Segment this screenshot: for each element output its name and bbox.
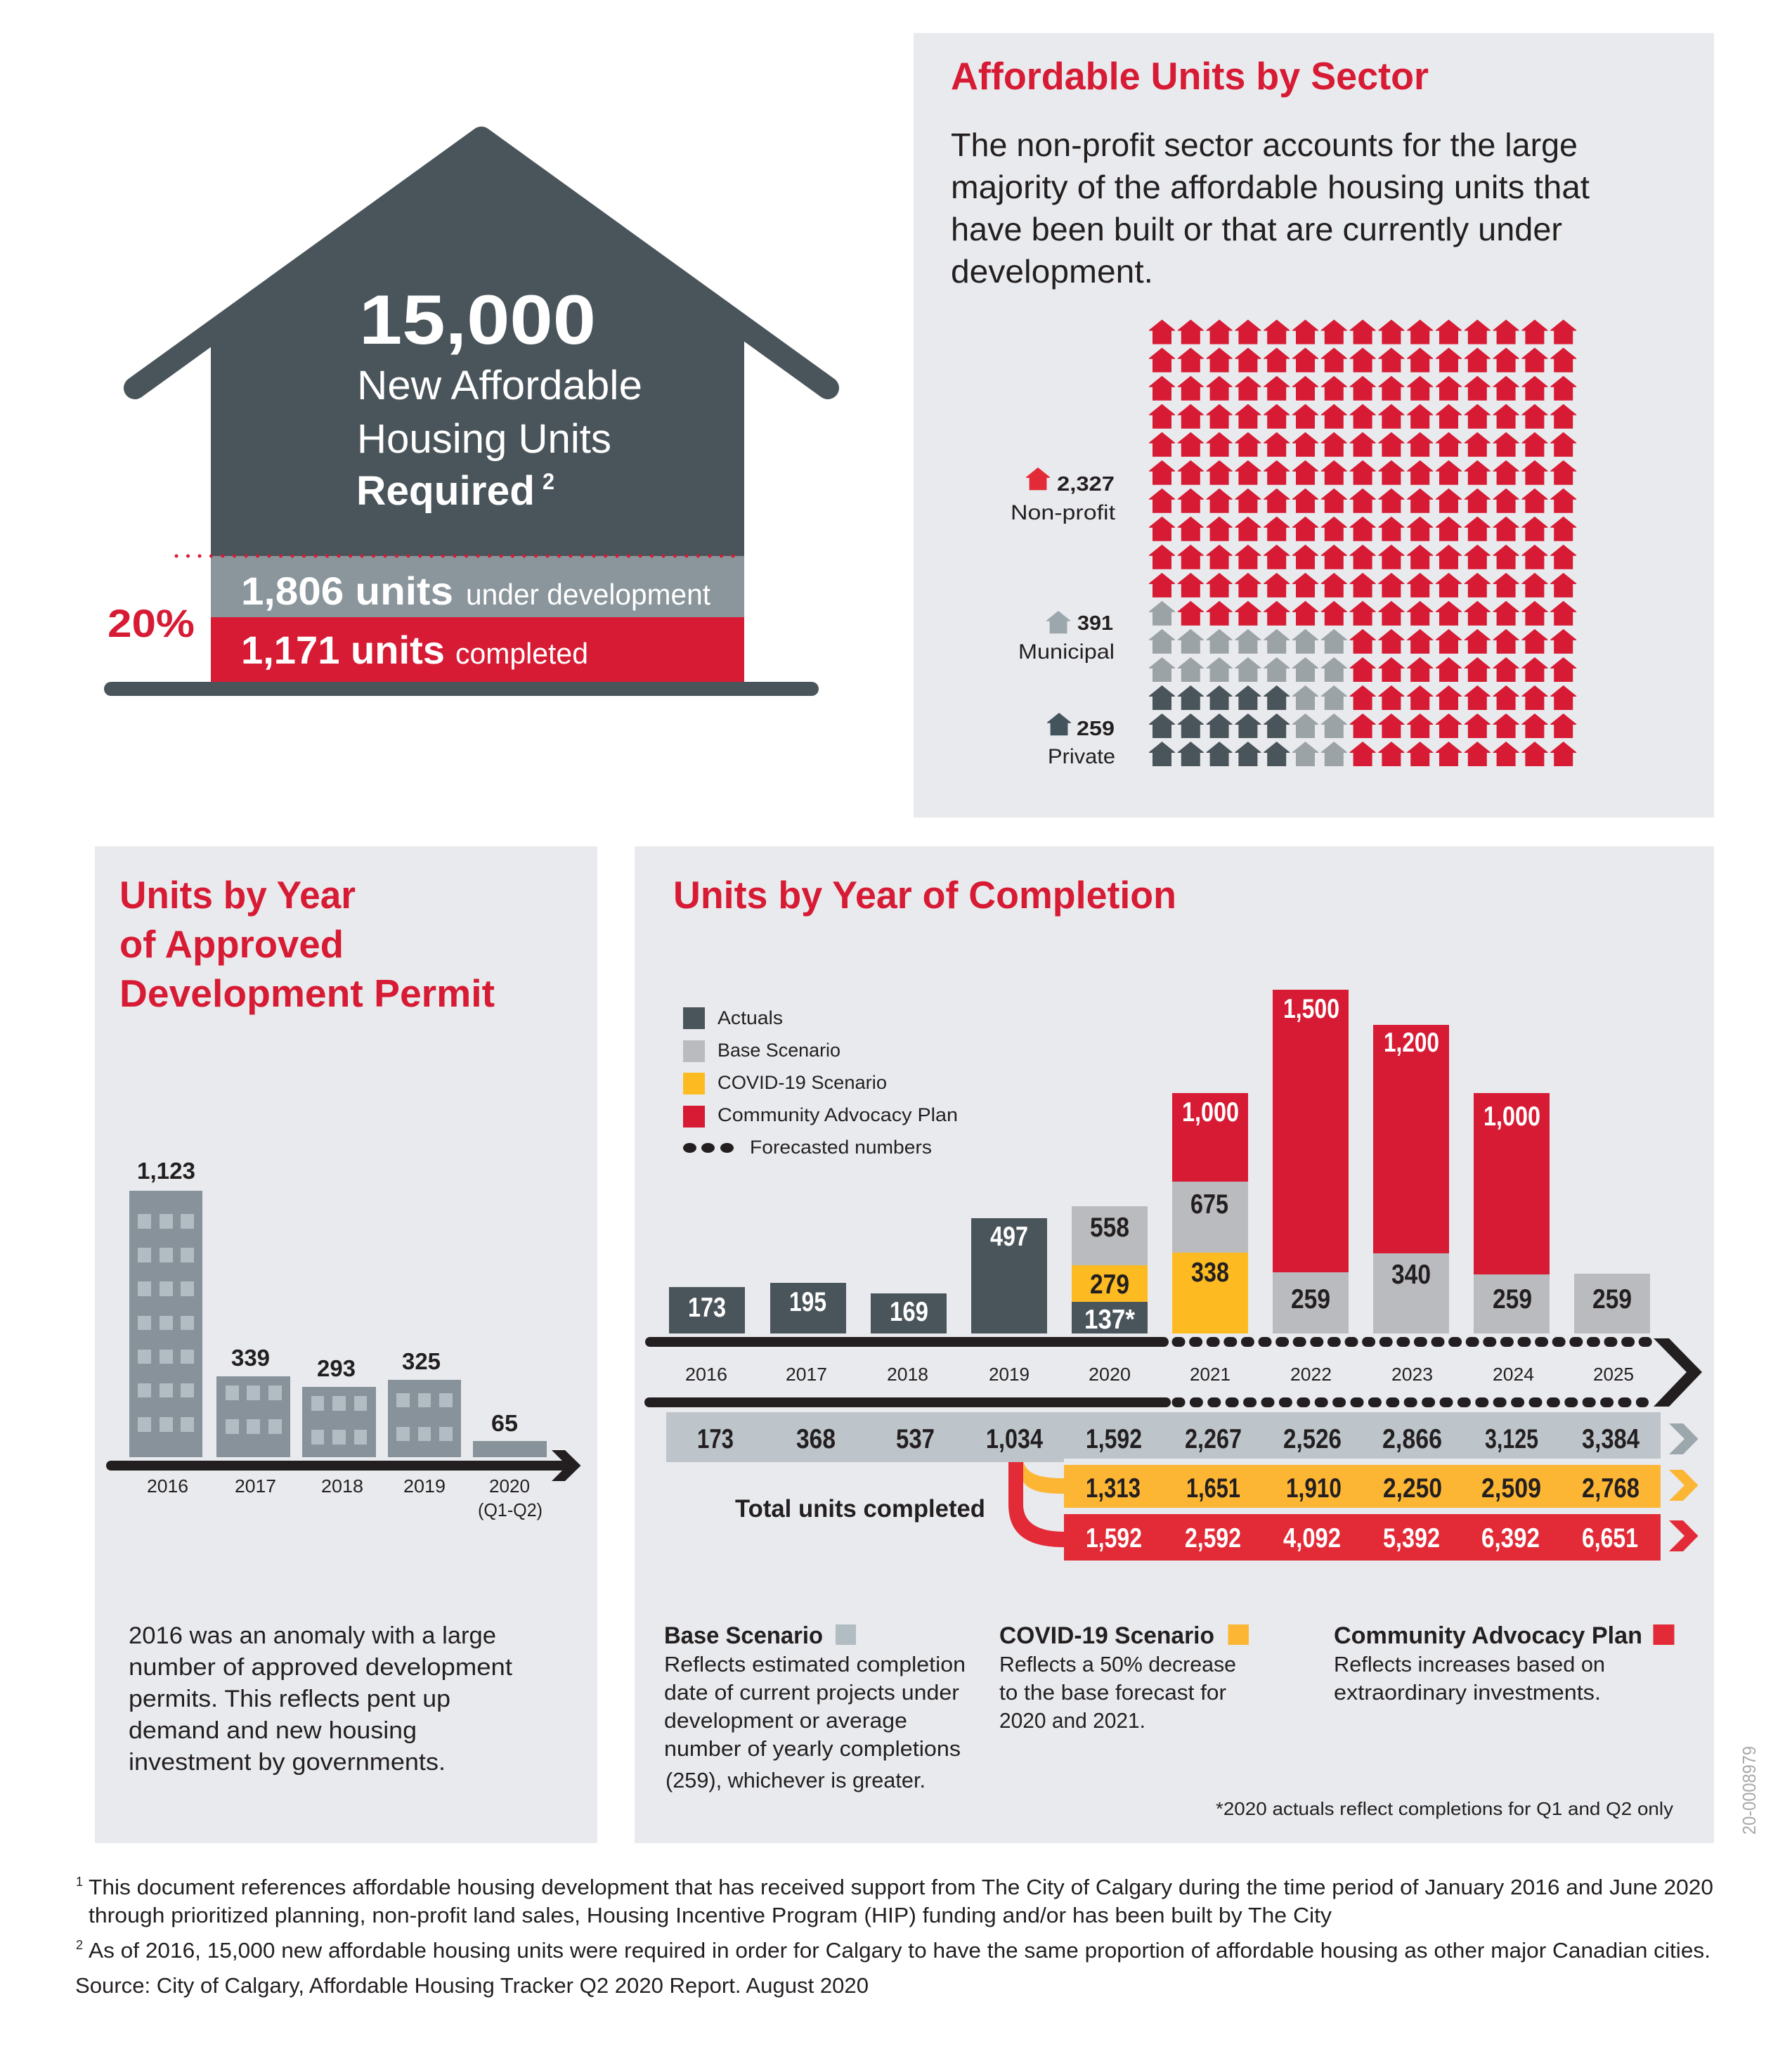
chart legend: Community Advocacy Plan bbox=[718, 1104, 958, 1125]
arrow: permit timeline axis bbox=[106, 1450, 580, 1481]
building 2019: 325 bbox=[402, 1348, 441, 1374]
stacked bar chart: completions by year bbox=[644, 990, 1702, 1407]
row: base scenario totals: 2,267 bbox=[1185, 1424, 1242, 1454]
note: community advocacy plan: extraordinary investments. bbox=[1334, 1680, 1601, 1705]
bar 2022: 1,500 bbox=[1283, 994, 1339, 1024]
permit commentary: demand and new housing bbox=[129, 1717, 417, 1744]
chart legend: Base Scenario bbox=[718, 1040, 840, 1061]
note: covid-19 scenario: COVID-19 Scenario bbox=[999, 1622, 1214, 1649]
bar 2017: 195 bbox=[789, 1287, 826, 1317]
building 2018: 293 bbox=[317, 1355, 356, 1381]
building 2018: 2018 bbox=[321, 1475, 363, 1497]
pictogram: house unit grid bbox=[1149, 320, 1576, 766]
footnote 2: 2 bbox=[76, 1938, 83, 1952]
building 2020 bbox=[473, 1410, 547, 1520]
legend: non-profit: Non-profit bbox=[1011, 501, 1116, 524]
footnote 1 bbox=[76, 1875, 1713, 1927]
row: community advocacy plan totals: 5,392 bbox=[1383, 1523, 1440, 1553]
bar 2022: 2022 bbox=[1290, 1364, 1332, 1385]
bar 2020: 2020 bbox=[1089, 1364, 1131, 1385]
row: base scenario totals: 368 bbox=[796, 1424, 836, 1454]
building 2020: 65 bbox=[491, 1410, 518, 1436]
chart legend: COVID-19 Scenario bbox=[718, 1072, 887, 1093]
house heading text: New Affordable bbox=[357, 363, 642, 408]
building 2017: 2017 bbox=[235, 1475, 276, 1497]
note: community advocacy plan: Reflects increases based on bbox=[1334, 1652, 1605, 1676]
row: base scenario totals: 3,384 bbox=[1582, 1424, 1640, 1454]
building 2017 bbox=[216, 1345, 290, 1497]
note: base scenario: (259), whichever is greater. bbox=[665, 1768, 926, 1792]
note: base scenario bbox=[664, 1622, 966, 1792]
bar 2022 bbox=[1273, 990, 1349, 1385]
chart legend bbox=[683, 1007, 958, 1158]
bar 2019: 2019 bbox=[989, 1364, 1030, 1385]
bar 2023: 2023 bbox=[1391, 1364, 1433, 1385]
row: base scenario totals: 1,592 bbox=[1086, 1424, 1142, 1454]
legend: non-profit bbox=[1011, 467, 1116, 524]
row: base scenario totals: 2,866 bbox=[1382, 1424, 1442, 1454]
building 2016: 1,123 bbox=[137, 1158, 195, 1184]
heading: permits bbox=[119, 873, 495, 1015]
connector: yellow branch bbox=[1023, 1461, 1064, 1494]
house heading text: 2 bbox=[543, 469, 554, 494]
heading: permits: Units by Year bbox=[119, 873, 356, 917]
footnote 1: This document references affordable housing development that has received support from The City of Calgary during the time period of January 2016 and June 2020 bbox=[89, 1875, 1713, 1899]
building 2020: 2020 bbox=[489, 1475, 530, 1497]
row: covid-19 scenario totals: 1,313 bbox=[1086, 1473, 1141, 1504]
completed label: 1,171 units bbox=[241, 628, 445, 672]
bar 2021: 1,000 bbox=[1182, 1097, 1239, 1128]
house heading text: Housing Units bbox=[357, 416, 611, 462]
row: covid-19 scenario totals: 2,768 bbox=[1582, 1473, 1640, 1504]
bar 2019: 497 bbox=[990, 1222, 1028, 1252]
bar 2016: 173 bbox=[688, 1293, 726, 1323]
bar 2016: 2016 bbox=[685, 1364, 727, 1385]
row: base scenario totals: 173 bbox=[697, 1424, 734, 1454]
legend: private bbox=[1047, 713, 1115, 768]
row: covid-19 scenario totals: 1,651 bbox=[1186, 1473, 1240, 1504]
20 percent label: 20% bbox=[108, 601, 195, 645]
bar 2025 bbox=[1574, 1274, 1650, 1385]
bar 2024: 259 bbox=[1493, 1284, 1532, 1314]
bar 2019 bbox=[971, 1218, 1047, 1385]
bar 2018: 169 bbox=[890, 1297, 928, 1327]
permit commentary: 2016 was an anomaly with a large bbox=[129, 1622, 496, 1649]
bar 2017: 2017 bbox=[786, 1364, 827, 1385]
bar 2017 bbox=[770, 1283, 846, 1385]
building 2016 bbox=[129, 1158, 202, 1497]
bar 2020: 137* bbox=[1084, 1305, 1136, 1335]
panel background bbox=[635, 846, 1714, 1843]
row: community advocacy plan totals: 4,092 bbox=[1283, 1523, 1341, 1553]
building 2020: (Q1-Q2) bbox=[478, 1499, 543, 1520]
dotted 20 percent marker bbox=[176, 554, 744, 558]
connector: red branch bbox=[1008, 1461, 1064, 1547]
house graphic: 15,000 units required bbox=[104, 137, 828, 696]
note: base scenario: Base Scenario bbox=[664, 1622, 823, 1649]
note: community advocacy plan: Community Advocacy Plan bbox=[1334, 1622, 1642, 1649]
panel background bbox=[914, 33, 1714, 818]
sector description: development. bbox=[951, 253, 1153, 290]
row: covid-19 scenario totals: 2,509 bbox=[1481, 1473, 1541, 1504]
sector description: have been built or that are currently under bbox=[951, 211, 1562, 247]
footnote 2: As of 2016, 15,000 new affordable housing units were required in order for Calgary to have the same proportion of affordable housing as other major Canadian cities. bbox=[89, 1938, 1710, 1963]
bar 2023 bbox=[1373, 1025, 1449, 1385]
bar 2021: 338 bbox=[1191, 1258, 1229, 1288]
note: base scenario: date of current projects under bbox=[664, 1680, 959, 1705]
house heading text: 15,000 bbox=[359, 280, 596, 358]
label: total units completed: Total units completed bbox=[735, 1495, 985, 1523]
footnote 1: 1 bbox=[76, 1875, 83, 1889]
note: covid-19 scenario: 2020 and 2021. bbox=[999, 1708, 1145, 1733]
building 2017: 339 bbox=[231, 1345, 270, 1371]
row: community advocacy plan totals bbox=[1064, 1514, 1698, 1561]
footnote 1: through prioritized planning, non-profit land sales, Housing Incentive Program (HIP) funding and/or has been built by The City bbox=[89, 1903, 1332, 1927]
bar 2018 bbox=[871, 1293, 947, 1385]
row: community advocacy plan totals: 6,651 bbox=[1582, 1523, 1638, 1553]
house heading text: Required bbox=[356, 468, 535, 514]
source line: Source: City of Calgary, Affordable Housing Tracker Q2 2020 Report. August 2020 bbox=[75, 1973, 869, 1998]
bar 2022: 259 bbox=[1291, 1284, 1330, 1314]
permit commentary: permits. This reflects pent up bbox=[129, 1686, 450, 1712]
bar 2021: 675 bbox=[1190, 1189, 1228, 1220]
sector description: The non-profit sector accounts for the large bbox=[951, 127, 1578, 163]
bar 2021 bbox=[1172, 1093, 1248, 1385]
chart legend: Actuals bbox=[718, 1007, 783, 1028]
row: base scenario totals: 1,034 bbox=[986, 1424, 1043, 1454]
bar 2025: 2025 bbox=[1593, 1364, 1634, 1385]
heading: permits: of Approved bbox=[119, 922, 344, 966]
sector description bbox=[951, 127, 1590, 290]
row: base scenario totals: 2,526 bbox=[1283, 1424, 1342, 1454]
note: 2020 asterisk: *2020 actuals reflect completions for Q1 and Q2 only bbox=[1216, 1798, 1673, 1819]
bar chart: buildings by year bbox=[106, 1158, 580, 1520]
bar 2024 bbox=[1474, 1093, 1550, 1385]
row: community advocacy plan totals: 6,392 bbox=[1481, 1523, 1540, 1553]
total units completed table bbox=[666, 1412, 1698, 1561]
heading: permits: Development Permit bbox=[119, 971, 495, 1015]
legend: municipal bbox=[1018, 611, 1115, 664]
sector description: majority of the affordable housing units that bbox=[951, 169, 1590, 205]
row: covid-19 scenario totals: 1,910 bbox=[1286, 1473, 1342, 1504]
row: base scenario totals: 3,125 bbox=[1485, 1424, 1538, 1454]
legend: private: Private bbox=[1048, 745, 1115, 768]
row: base scenario totals: 537 bbox=[896, 1424, 935, 1454]
permit commentary: investment by governments. bbox=[129, 1749, 446, 1776]
arrow: completion timeline axis bbox=[644, 1337, 1702, 1407]
bar 2020 bbox=[1072, 1206, 1148, 1385]
note: base scenario: number of yearly completions bbox=[664, 1736, 961, 1761]
under development label: 1,806 units bbox=[241, 569, 453, 613]
permit commentary bbox=[129, 1622, 513, 1776]
bar 2020: 558 bbox=[1090, 1213, 1129, 1243]
panel: units by year of approved development permit bbox=[95, 846, 597, 1843]
note: covid-19 scenario: to the base forecast for bbox=[999, 1680, 1226, 1705]
bar 2024: 1,000 bbox=[1483, 1101, 1540, 1132]
note: community advocacy plan bbox=[1334, 1622, 1674, 1705]
note: covid-19 scenario: Reflects a 50% decrease bbox=[999, 1652, 1236, 1676]
chart legend: Forecasted numbers bbox=[750, 1137, 932, 1158]
document code: 20-0008979 bbox=[1739, 1746, 1760, 1835]
building 2018 bbox=[302, 1355, 376, 1497]
band: completed bbox=[211, 617, 744, 682]
icon: house roof and walls bbox=[135, 137, 828, 556]
permit commentary: number of approved development bbox=[129, 1654, 513, 1681]
house base line bbox=[104, 682, 819, 696]
bar 2021: 2021 bbox=[1190, 1364, 1231, 1385]
bar 2018: 2018 bbox=[887, 1364, 928, 1385]
heading: sector: Affordable Units by Sector bbox=[951, 54, 1429, 98]
legend: non-profit: 2,327 bbox=[1057, 473, 1115, 496]
bar 2023: 1,200 bbox=[1384, 1028, 1439, 1058]
legend: private: 259 bbox=[1077, 718, 1115, 740]
building 2019: 2019 bbox=[403, 1475, 446, 1497]
under development label: under development bbox=[466, 578, 710, 611]
house heading text bbox=[356, 280, 642, 514]
bar 2023: 340 bbox=[1391, 1260, 1431, 1290]
bar 2020: 279 bbox=[1090, 1269, 1129, 1300]
note: base scenario: development or average bbox=[664, 1708, 907, 1733]
under development label bbox=[241, 569, 710, 613]
building 2016: 2016 bbox=[147, 1475, 188, 1497]
completed label: completed bbox=[455, 637, 588, 670]
panel: units by year of completion bbox=[635, 846, 1714, 1843]
bar 2024: 2024 bbox=[1493, 1364, 1534, 1385]
row: covid-19 scenario totals: 2,250 bbox=[1383, 1473, 1442, 1504]
row: community advocacy plan totals: 1,592 bbox=[1086, 1523, 1142, 1553]
building 2019 bbox=[388, 1348, 461, 1497]
bar 2016 bbox=[669, 1287, 745, 1385]
row: covid-19 scenario totals bbox=[1064, 1465, 1698, 1508]
note: covid-19 scenario bbox=[999, 1622, 1249, 1733]
panel background bbox=[95, 846, 597, 1843]
heading: completion: Units by Year of Completion bbox=[673, 873, 1176, 917]
row: base scenario totals bbox=[666, 1412, 1698, 1462]
row: community advocacy plan totals: 2,592 bbox=[1185, 1523, 1241, 1553]
band: under development bbox=[211, 556, 744, 617]
footnotes and source bbox=[75, 1875, 1713, 1998]
note: base scenario: Reflects estimated completion bbox=[664, 1652, 966, 1676]
bar 2025: 259 bbox=[1592, 1284, 1632, 1314]
legend: municipal: Municipal bbox=[1018, 640, 1115, 664]
panel: affordable units by sector bbox=[914, 33, 1714, 818]
legend: municipal: 391 bbox=[1077, 612, 1113, 635]
completed label bbox=[241, 628, 588, 672]
